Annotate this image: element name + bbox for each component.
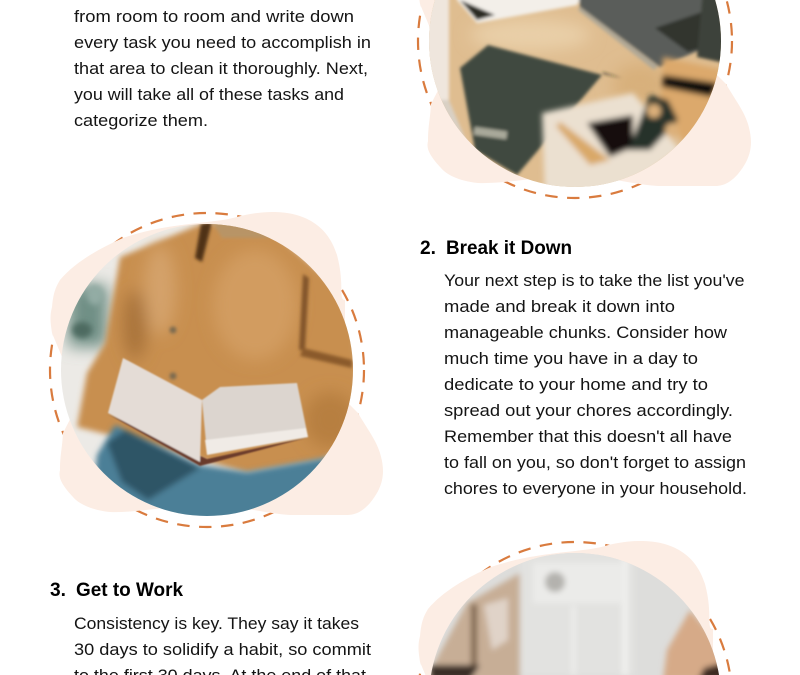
peach blob	[418, 0, 751, 186]
book	[108, 414, 309, 466]
step 2 body text: spread out your chores accordingly.	[444, 401, 733, 420]
step 1 body text: categorize them.	[74, 111, 208, 130]
step 3 body text	[74, 614, 371, 675]
heading: step 2: 2.	[420, 238, 436, 259]
step 2 body text: manageable chunks. Consider how	[444, 323, 728, 342]
step 3 body text: 30 days to solidify a habit, so commit	[74, 640, 371, 659]
photo circle: person reading a book	[50, 212, 383, 527]
photo	[55, 220, 360, 525]
dashed ring	[50, 213, 364, 527]
heading: step 2: Break it Down	[446, 238, 572, 259]
photo	[425, 550, 725, 675]
step 1 body text	[74, 7, 371, 130]
step 2 body text: much time you have in a day to	[444, 349, 698, 368]
step 1 body text: you will take all of these tasks and	[74, 85, 344, 104]
step 2 body text: to fall on you, so don't forget to assign	[444, 453, 746, 472]
photo circle: desk with notebook and laptop	[418, 0, 751, 198]
dashed ring	[418, 0, 732, 198]
step 3 body text: Consistency is key. They say it takes	[74, 614, 359, 633]
dashed ring	[418, 542, 732, 675]
heading: step 3: 3.	[50, 580, 66, 601]
step 1 body text: from room to room and write down	[74, 7, 354, 26]
step 2 body text: Your next step is to take the list you've	[444, 271, 744, 290]
step 2 body text	[444, 271, 747, 498]
step 2 body text: made and break it down into	[444, 297, 675, 316]
step 1 body text: every task you need to accomplish in	[74, 33, 371, 52]
photo	[425, 0, 725, 195]
step 1 body text: that area to clean it thoroughly. Next,	[74, 59, 368, 78]
photo circle: tiled wall with towels	[418, 541, 751, 675]
step 2 body text: dedicate to your home and try to	[444, 375, 708, 394]
step 2 body text: chores to everyone in your household.	[444, 479, 747, 498]
step 2 body text: Remember that this doesn't all have	[444, 427, 732, 446]
heading: step 3: Get to Work	[76, 580, 183, 601]
peach blob	[50, 212, 383, 515]
peach blob	[418, 541, 751, 675]
